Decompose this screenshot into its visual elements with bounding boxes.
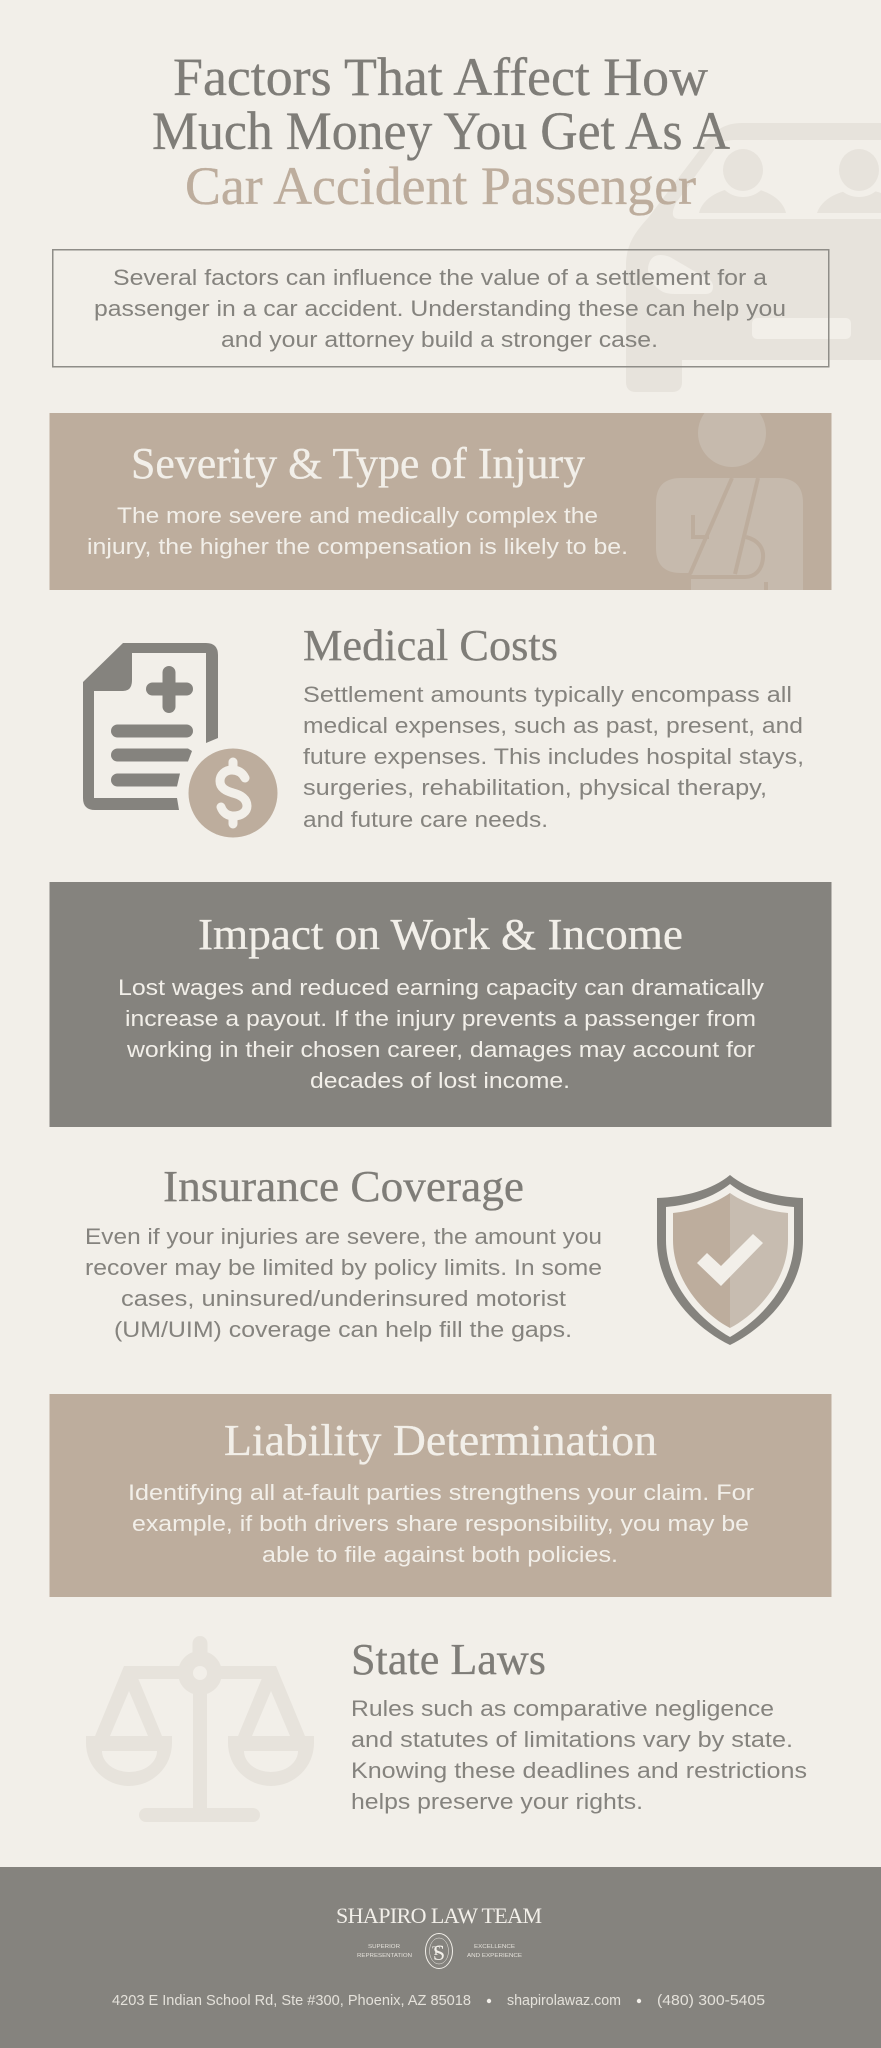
footer (0, 1867, 881, 2048)
heading: insurance coverage: Insurance Coverage (163, 1162, 524, 1211)
panel: state laws (86, 1635, 807, 1822)
contact line: shapirolawaz.com (507, 1992, 621, 2009)
text: state laws description: Knowing these deadlines and restrictions (351, 1758, 807, 1783)
text: state laws description: Rules such as comparative negligence (351, 1696, 774, 1721)
text: liability description: example, if both drivers share responsibility, you may be (132, 1511, 749, 1536)
logo taglines and monogram: S (433, 1940, 445, 1965)
logo taglines and monogram: REPRESENTATION (357, 1953, 412, 1959)
text: severity description (87, 503, 628, 559)
icon: medical bill with dollar coin (83, 643, 278, 838)
text: severity description: injury, the higher the compensation is likely to be. (87, 534, 628, 559)
logo taglines and monogram: EXCELLENCE (474, 1944, 515, 1950)
text: state laws description: and statutes of limitations vary by state. (351, 1727, 793, 1752)
text: insurance description: (UM/UIM) coverage can help fill the gaps. (114, 1317, 572, 1342)
heading: medical costs: Medical Costs (303, 621, 558, 670)
panel: insurance coverage (85, 1162, 803, 1345)
contact line: (480) 300-5405 (657, 1992, 765, 2009)
heading: state laws: State Laws (351, 1635, 546, 1684)
text: medical costs description: surgeries, rehabilitation, physical therapy, (303, 775, 767, 800)
panel: liability determination (50, 1394, 832, 1597)
title: Much Money You Get As A (152, 101, 730, 161)
panel: impact on work and income (50, 882, 832, 1127)
text: liability description: able to file against both policies. (262, 1542, 618, 1567)
logo taglines and monogram: T (432, 1943, 440, 1958)
text: impact description: decades of lost income. (310, 1068, 570, 1093)
title: Car Accident Passenger (185, 156, 696, 216)
text: liability description (128, 1480, 754, 1567)
title (152, 47, 730, 216)
panel: severity and type of injury (50, 399, 832, 590)
icon: car with passengers watermark (626, 123, 881, 392)
text: severity description: The more severe and medically complex the (117, 503, 598, 528)
text: impact description: increase a payout. If the injury prevents a passenger from (125, 1006, 756, 1031)
text: state laws description: helps preserve your rights. (351, 1789, 643, 1814)
panel: medical costs (83, 621, 804, 838)
logo taglines and monogram (357, 1934, 522, 1968)
text: impact description (118, 975, 764, 1093)
contact line: 4203 E Indian School Rd, Ste #300, Phoenix, AZ 85018 (112, 1992, 471, 2009)
text: insurance description: Even if your injuries are severe, the amount you (85, 1224, 602, 1249)
icon: shield with checkmark (657, 1175, 803, 1345)
text: insurance description: recover may be limited by policy limits. In some (85, 1255, 602, 1280)
logo taglines and monogram: AND EXPERIENCE (467, 1953, 522, 1959)
icon: balance scales (86, 1636, 314, 1822)
text: liability description: Identifying all at-fault parties strengthens your claim. For (128, 1480, 754, 1505)
intro text: Several factors can influence the value of a settlement for a (113, 265, 768, 290)
panel: introduction (53, 250, 829, 367)
text: medical costs description: Settlement amounts typically encompass all (303, 682, 792, 707)
text: medical costs description: future expenses. This includes hospital stays, (303, 744, 804, 769)
contact line (112, 1992, 765, 2009)
text: medical costs description (303, 682, 804, 832)
text: insurance description (85, 1224, 602, 1342)
heading: impact on work: Impact on Work & Income (198, 910, 683, 959)
heading: liability determination: Liability Determination (224, 1416, 657, 1465)
intro text: passenger in a car accident. Understanding these can help you (94, 296, 786, 321)
intro text (94, 265, 786, 352)
text: state laws description (351, 1696, 807, 1814)
icon: person with arm sling (656, 399, 803, 590)
intro text: and your attorney build a stronger case. (221, 327, 658, 352)
title: Factors That Affect How (173, 47, 708, 107)
logo taglines and monogram: SUPERIOR (368, 1944, 400, 1950)
text: medical costs description: and future care needs. (303, 807, 548, 832)
heading: severity: Severity & Type of Injury (131, 439, 585, 488)
logo wordmark: SHAPIRO LAW TEAM (336, 1903, 542, 1928)
text: insurance description: cases, uninsured/underinsured motorist (121, 1286, 566, 1311)
text: impact description: working in their chosen career, damages may account for (126, 1037, 755, 1062)
text: impact description: Lost wages and reduced earning capacity can dramatically (118, 975, 764, 1000)
text: medical costs description: medical expenses, such as past, present, and (303, 713, 803, 738)
